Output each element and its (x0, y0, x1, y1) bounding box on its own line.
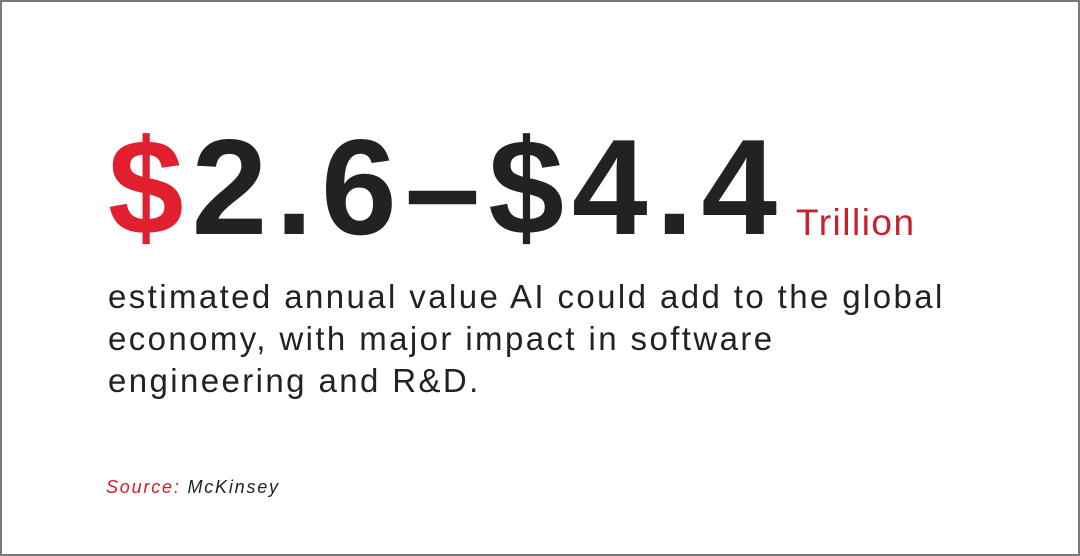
unit label: Trillion (796, 202, 916, 243)
description text (108, 278, 945, 399)
description text: economy, with major impact in software (108, 320, 774, 357)
headline figure: $2.6–$4.4 (108, 111, 785, 263)
description text: estimated annual value AI could add to the global (108, 278, 945, 315)
description text: engineering and R&D. (108, 362, 481, 399)
source note: Source: McKinsey (106, 477, 280, 497)
